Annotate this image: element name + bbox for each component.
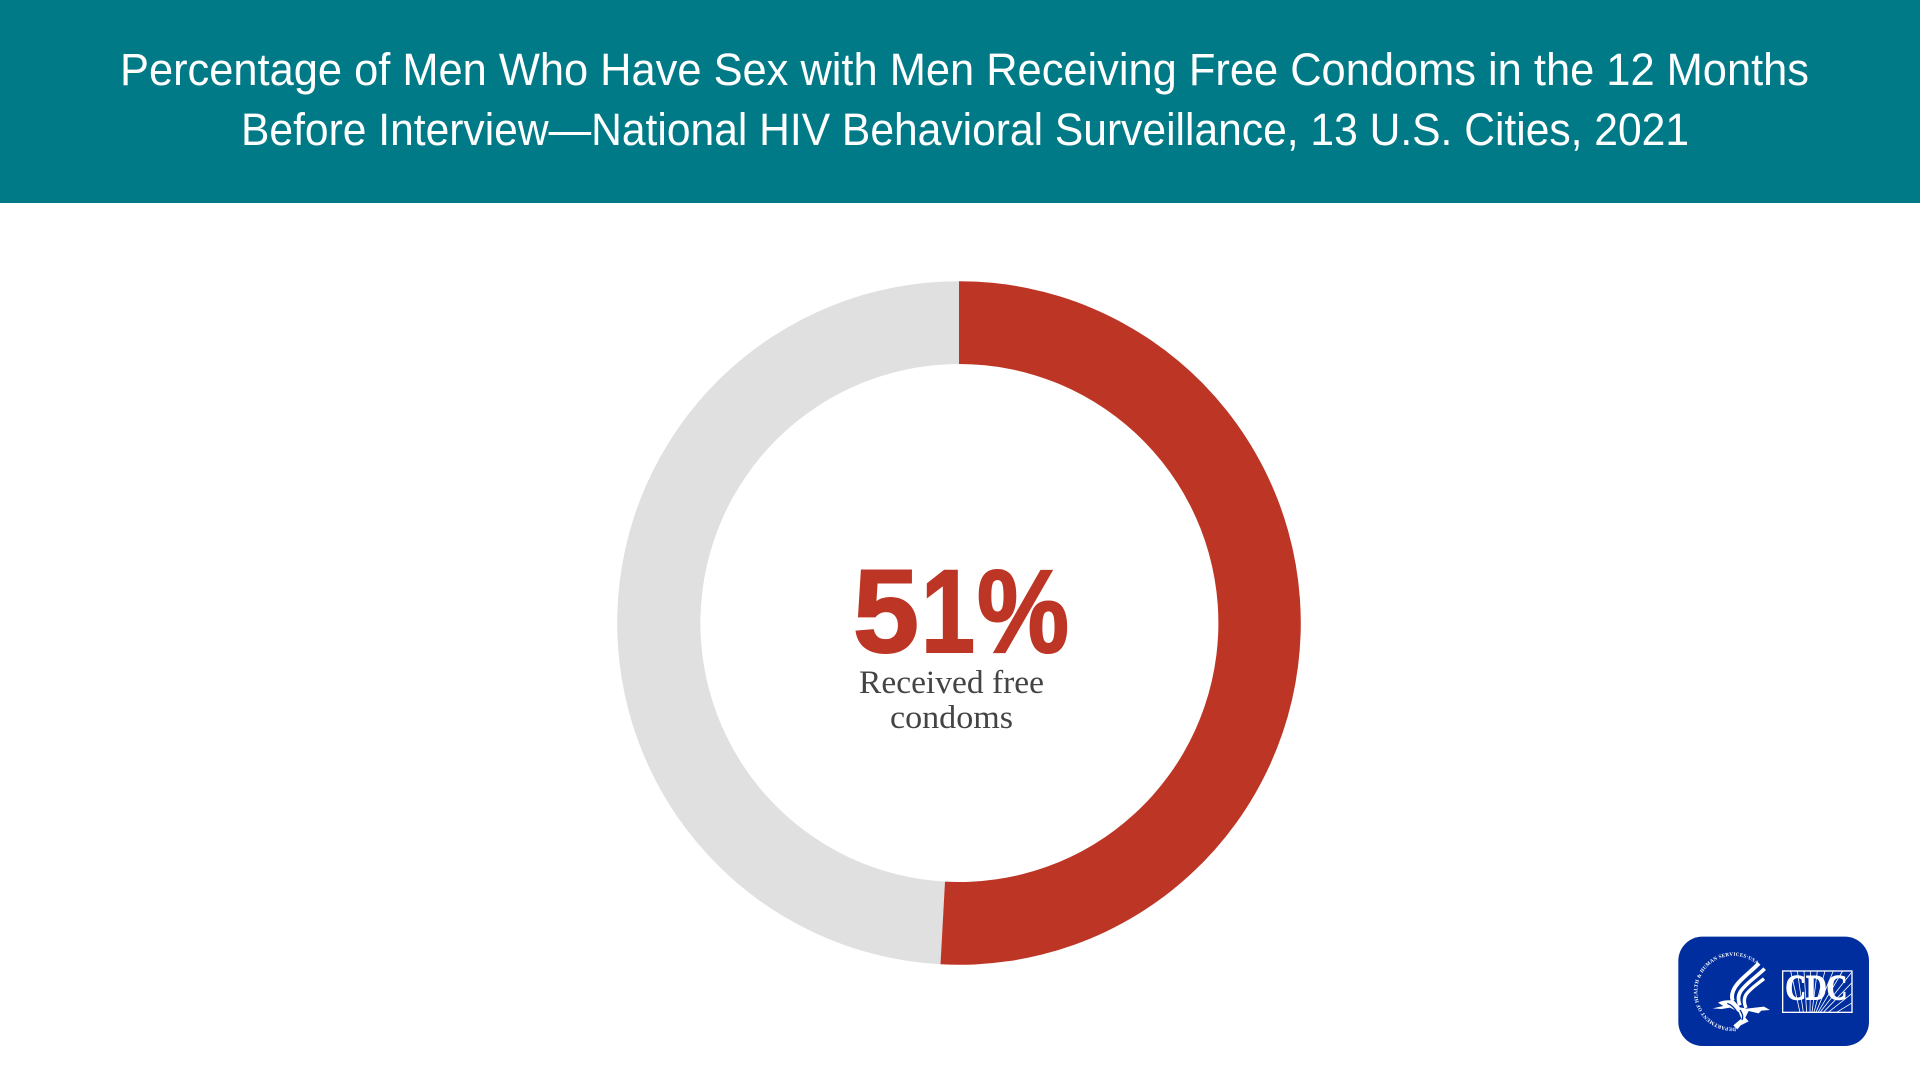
eagle wing bands	[1732, 963, 1765, 1008]
logo background	[1678, 937, 1869, 1046]
logo: HHS and CDC	[1678, 936, 1869, 1046]
eagle body	[1713, 1000, 1770, 1029]
CDC wordmark: CDC	[1785, 968, 1847, 1008]
value 51%: 1	[921, 546, 975, 678]
title text: Percentage of Men Who Have Sex with Men Receiving Free Condoms in the 12 Months	[120, 44, 1809, 95]
HHS eagle icon	[1713, 963, 1770, 1029]
title text	[120, 44, 1809, 155]
donut chart	[617, 281, 1301, 965]
value 51%	[853, 546, 1069, 678]
eagle body separation lines	[1727, 1003, 1743, 1020]
donut segment: received free condoms 51%	[940, 281, 1301, 965]
caption: condoms	[890, 700, 1013, 736]
CDC logo box	[1783, 968, 1852, 1012]
donut segment: did not receive	[617, 281, 959, 964]
value 51%: %	[977, 546, 1069, 678]
rays	[1791, 971, 1851, 1012]
caption	[859, 665, 1044, 736]
title text: Before Interview—National HIV Behavioral Surveillance, 13 U.S. Cities, 2021	[241, 104, 1689, 155]
caption: Received free	[859, 665, 1044, 701]
HHS seal ring text: DEPARTMENT OF HEALTH & HUMAN SERVICES·USA	[1694, 952, 1758, 1032]
center label	[853, 546, 1069, 736]
value 51%: 5	[853, 546, 919, 678]
title banner	[0, 0, 1920, 203]
